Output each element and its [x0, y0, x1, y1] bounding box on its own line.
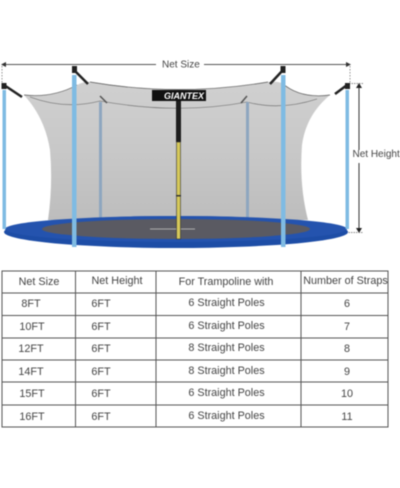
size table [2, 270, 388, 428]
trampoline column: 8 Straight Poles [188, 342, 265, 354]
trampoline column: 8 Straight Poles [188, 365, 265, 377]
center strap with label: GIANTEX [164, 91, 205, 101]
center strap with label [152, 90, 206, 239]
net height column: 6FT [91, 388, 111, 400]
back poles [99, 96, 249, 219]
net size column: 10FT [19, 321, 45, 333]
trampoline column: 6 Straight Poles [188, 387, 265, 399]
net height column: 6FT [91, 321, 111, 333]
net size dimension [1, 60, 351, 84]
net height column: 6FT [91, 411, 111, 423]
net height column: 6FT [91, 366, 111, 378]
pole caps and straps [2, 66, 350, 97]
trampoline blue ring [4, 216, 348, 248]
net height column: 6FT [91, 298, 111, 310]
straps column: 9 [344, 366, 350, 378]
front poles [2, 75, 349, 247]
net size column: 16FT [19, 411, 45, 423]
straps column: 10 [341, 388, 353, 400]
net height dimension: Net Height [352, 149, 400, 160]
straps column [341, 298, 353, 423]
table header: For Trampoline with [179, 276, 273, 288]
net size column: 14FT [18, 366, 44, 378]
net size column: 8FT [21, 298, 41, 310]
net size column [18, 298, 45, 423]
trampoline column [188, 297, 265, 422]
table header: Net Size [19, 276, 59, 288]
table header: Number of Straps [303, 275, 388, 287]
net size dimension: Net Size [162, 60, 200, 70]
table header [19, 275, 388, 288]
safety net [24, 82, 330, 220]
trampoline column: 6 Straight Poles [188, 297, 265, 309]
net size column: 15FT [19, 388, 45, 400]
straps column: 11 [341, 411, 353, 423]
trampoline column: 6 Straight Poles [188, 320, 265, 332]
straps column: 7 [344, 321, 350, 333]
straps column: 6 [344, 298, 350, 310]
net height column: 6FT [91, 343, 111, 355]
straps column: 8 [344, 343, 350, 355]
net height dimension [346, 83, 400, 233]
net size column: 12FT [18, 343, 44, 355]
trampoline column: 6 Straight Poles [188, 410, 265, 422]
table header: Net Height [91, 275, 143, 287]
net height column [91, 298, 111, 423]
